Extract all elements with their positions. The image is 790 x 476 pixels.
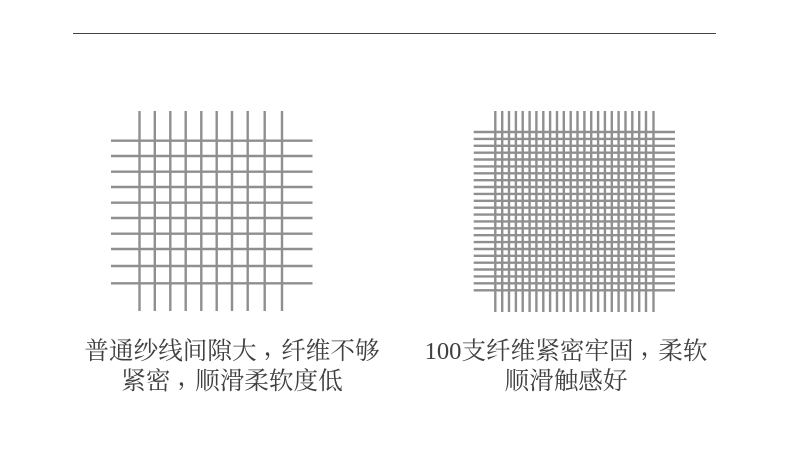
top divider rule <box>73 33 716 34</box>
caption: dense weave <box>425 334 707 395</box>
caption: dense weave: 100支纤维紧密牢固 ，柔软 <box>425 334 707 365</box>
caption: dense weave: 顺滑触感好 <box>504 368 627 395</box>
caption: loose weave: 紧密 ，顺滑柔软度低 <box>121 364 343 395</box>
caption: loose weave: 普通纱线间隙大 ，纤维不够 <box>84 334 380 365</box>
caption: loose weave <box>84 334 380 395</box>
